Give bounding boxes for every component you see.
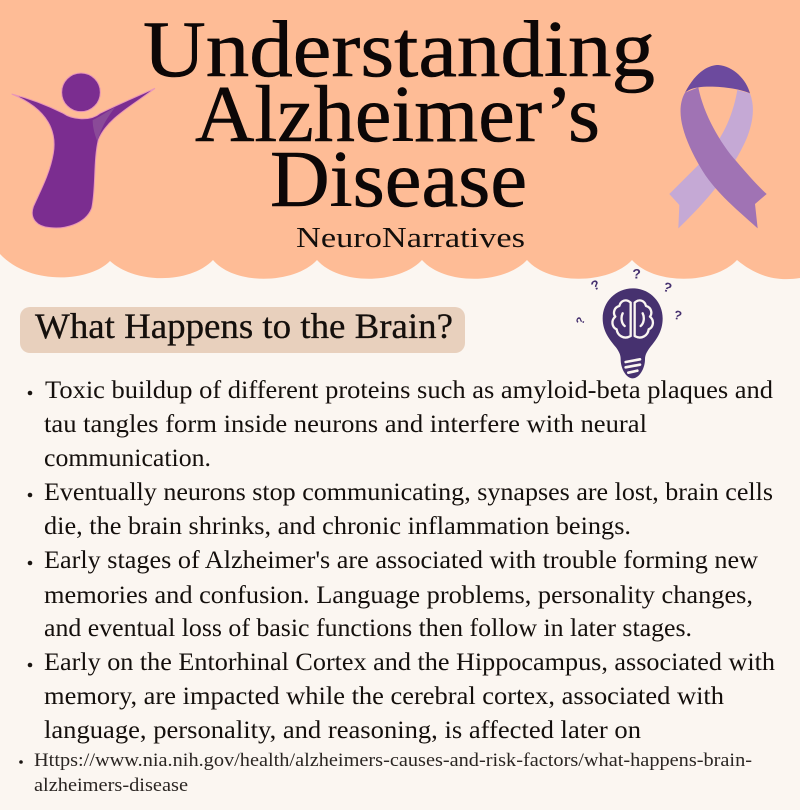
title [143,6,655,224]
bullet: brain regions: language, personality, and reasoning, is affected later on [44,717,642,744]
bullet: early stages: and eventual loss of basic functions then follow in later stages. [44,615,692,642]
bullet: brain regions [28,649,776,744]
source link: alzheimers-disease [34,775,188,796]
bullet: neurons stop communicating [28,479,773,540]
icon: raised-arms figure [12,73,155,228]
bullet: neurons stop communicating: die, the brain shrinks, and chronic inflammation beings. [44,513,631,540]
bullet: toxic buildup: tau tangles form inside neurons and interfere with neural [44,411,647,438]
title: Alzheimer’s [195,71,600,159]
title: Understanding [143,6,655,94]
icon: lightbulb with brain and question marks: ? [672,308,683,323]
bullet: neurons stop communicating: Eventually neurons stop communicating, synapses are lost, brain cells [44,479,773,506]
title: Disease [270,136,527,224]
bullet: early stages: memories and confusion. Language problems, personality changes, [44,582,753,609]
bullet: toxic buildup: communication. [44,445,211,472]
source link: Https://www.nia.nih.gov/health/alzheimers-causes-and-risk-factors/what-happens-brain- [34,750,752,771]
subtitle: NeuroNarratives: NeuroNarratives [296,222,525,254]
icon: awareness ribbon [669,65,767,228]
icon: lightbulb with brain and question marks: ? [574,316,588,326]
bullet: brain regions: memory, are impacted while the cerebral cortex, associated with [44,683,725,710]
header banner with scalloped edge [0,0,800,279]
bullet: brain regions: Early on the Entorhinal Cortex and the Hippocampus, associated with [44,649,776,676]
bullet: early stages: Early stages of Alzheimer's are associated with trouble forming new [44,547,758,574]
icon: lightbulb with brain and question marks: ? [661,279,674,296]
icon: lightbulb with brain and question marks [574,265,683,378]
bullet: toxic buildup [28,377,774,472]
bullet: early stages [28,547,758,642]
icon: lightbulb with brain and question marks: ? [589,277,602,294]
section heading pill: What Happens to the Brain? [35,306,453,346]
icon: lightbulb with brain and question marks: ? [632,265,641,281]
bullet: toxic buildup: Toxic buildup of different proteins such as amyloid-beta plaques and [45,377,774,404]
source link [19,750,752,796]
